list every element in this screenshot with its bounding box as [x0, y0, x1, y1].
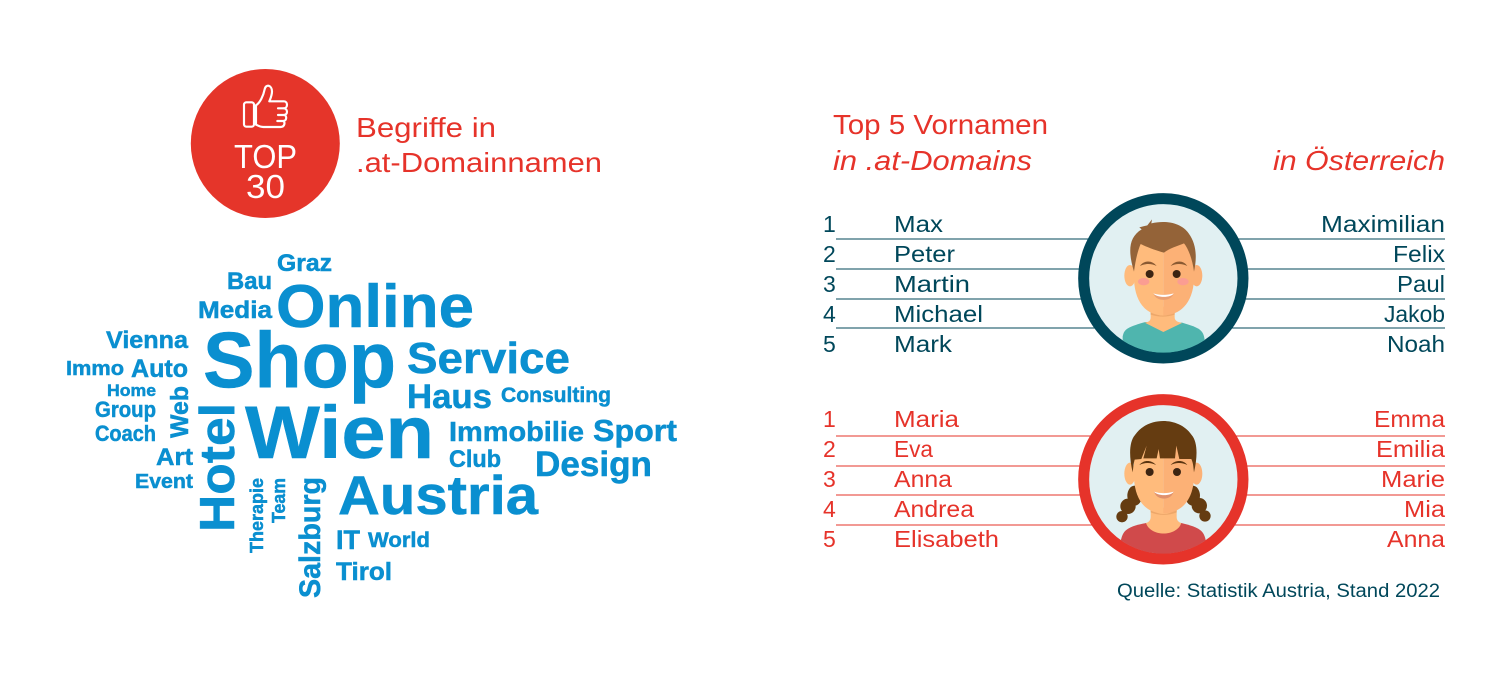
badge text: [234, 138, 297, 205]
icon: girl avatar: [1084, 400, 1243, 559]
word cloud: Austria: [338, 464, 538, 526]
table: male names: Michael: [894, 301, 983, 327]
word cloud: Immo: [66, 358, 124, 380]
word cloud: Tirol: [336, 558, 392, 586]
word cloud: Auto: [131, 355, 188, 383]
word cloud: World: [368, 529, 430, 552]
heading: Top 5 Vornamen: in Österreich: [1273, 145, 1445, 176]
word cloud: Hotel: [191, 403, 245, 532]
word cloud: Club: [449, 446, 501, 473]
table: male names: Maximilian: [1321, 211, 1445, 237]
word cloud: Sport: [593, 413, 677, 448]
table: female names: Mia: [1404, 496, 1445, 522]
table: female names: Marie: [1381, 466, 1445, 492]
word cloud: Immobilie: [449, 416, 584, 447]
table: male names: Mark: [894, 331, 953, 357]
word cloud: Vienna: [106, 327, 189, 354]
word cloud: Salzburg: [294, 477, 327, 598]
table: male names: 1: [823, 211, 836, 237]
table: female names: Anna: [1387, 526, 1445, 552]
table: female names: Anna: [894, 466, 952, 492]
table: female names: 1: [823, 406, 836, 432]
word cloud: Bau: [227, 268, 272, 295]
word cloud: Haus: [407, 378, 492, 416]
table: female names: Andrea: [894, 496, 974, 522]
table: female names: 2: [823, 436, 836, 462]
table: male names: Paul: [1397, 271, 1445, 297]
heading: Begriffe in .at-Domainnamen: [356, 112, 602, 178]
heading: Top 5 Vornamen: in .at-Domains: [833, 145, 1032, 176]
word cloud: [66, 250, 677, 598]
heading: Begriffe in .at-Domainnamen: .at-Domainnamen: [356, 147, 602, 178]
table: female names: [823, 406, 1445, 552]
table: male names: Martin: [894, 271, 970, 297]
word cloud: IT: [336, 525, 361, 555]
table: female names: Emilia: [1376, 436, 1445, 462]
table: female names: Emma: [1374, 406, 1445, 432]
word cloud: Media: [198, 297, 273, 324]
table: female names: 5: [823, 526, 836, 552]
table: male names: Peter: [894, 241, 955, 267]
icon: thumbs up: [244, 86, 287, 127]
word cloud: Wien: [245, 391, 434, 474]
word cloud: Coach: [95, 421, 156, 446]
word cloud: Online: [276, 273, 474, 340]
word cloud: Team: [269, 478, 289, 523]
table: female names: 3: [823, 466, 836, 492]
word cloud: Design: [535, 445, 652, 484]
word cloud: Home: [107, 381, 156, 400]
badge text: 30: [246, 168, 285, 205]
word cloud: Web: [166, 386, 194, 438]
word cloud: Event: [135, 471, 193, 493]
table: male names: 5: [823, 331, 836, 357]
table: female names: Eva: [894, 436, 933, 462]
word cloud: Shop: [203, 315, 396, 404]
word cloud: Service: [407, 334, 570, 383]
word cloud: Art: [156, 444, 193, 471]
source note: Quelle: Statistik Austria, Stand 2022: [1117, 581, 1440, 602]
table: male names: Noah: [1387, 331, 1445, 357]
table: male names: 2: [823, 241, 836, 267]
table: male names: Felix: [1393, 241, 1446, 267]
icon: boy avatar: [1084, 199, 1243, 358]
table: female names: Elisabeth: [894, 526, 999, 552]
table: male names: 3: [823, 271, 836, 297]
badge: top 30: [191, 69, 340, 218]
heading: Top 5 Vornamen: [833, 109, 1445, 176]
table: male names: [823, 211, 1446, 357]
word cloud: Group: [95, 397, 156, 422]
badge text: TOP: [234, 138, 297, 175]
word cloud: Graz: [277, 250, 332, 277]
table: female names: 4: [823, 496, 836, 522]
heading: Begriffe in .at-Domainnamen: Begriffe in: [356, 112, 496, 143]
heading: Top 5 Vornamen: Top 5 Vornamen: [833, 109, 1048, 140]
table: male names: Max: [894, 211, 944, 237]
word cloud: Therapie: [247, 478, 267, 553]
word cloud: Consulting: [501, 384, 611, 407]
table: male names: 4: [823, 301, 836, 327]
table: female names: Maria: [894, 406, 959, 432]
table: male names: Jakob: [1384, 301, 1445, 327]
